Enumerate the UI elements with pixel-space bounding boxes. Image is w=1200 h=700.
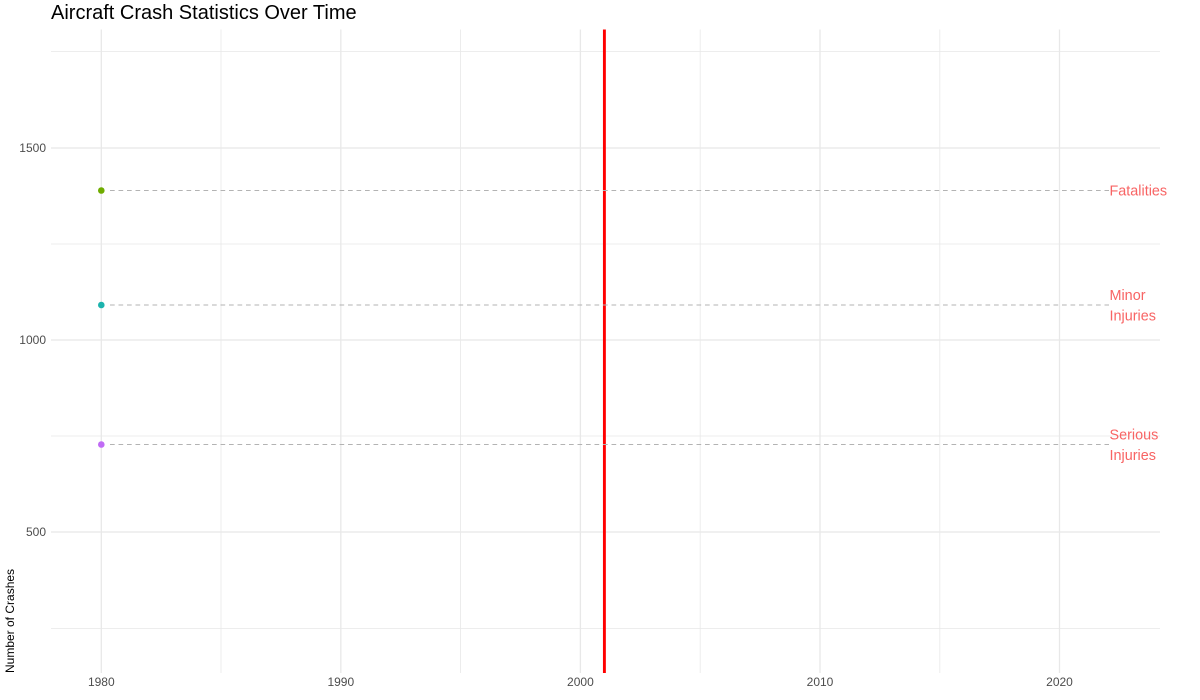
reference line: 2001 (603, 30, 606, 673)
y axis title: Number of Crashes (3, 569, 17, 673)
y axis labels: 1000 (19, 333, 46, 347)
x axis labels (88, 675, 1073, 689)
series: minor injuries (98, 288, 1156, 324)
x axis labels: 2010 (807, 675, 834, 689)
series: minor injuries: Minor (1110, 288, 1146, 304)
x axis labels: 1980 (88, 675, 115, 689)
series: serious injuries (98, 428, 1158, 464)
title: Aircraft Crash Statistics Over Time (51, 2, 357, 24)
series: fatalities: Fatalities (1110, 184, 1167, 200)
x axis labels: 1990 (327, 675, 354, 689)
series: serious injuries: Serious (1110, 428, 1158, 444)
series: fatalities (98, 184, 1167, 200)
series: minor injuries: Injuries (1110, 308, 1156, 324)
x axis labels: 2000 (567, 675, 594, 689)
y axis labels (19, 141, 46, 539)
y axis labels: 1500 (19, 141, 46, 155)
y axis labels: 500 (26, 525, 46, 539)
x axis labels: 2020 (1046, 675, 1073, 689)
series: serious injuries: Injuries (1110, 448, 1156, 464)
